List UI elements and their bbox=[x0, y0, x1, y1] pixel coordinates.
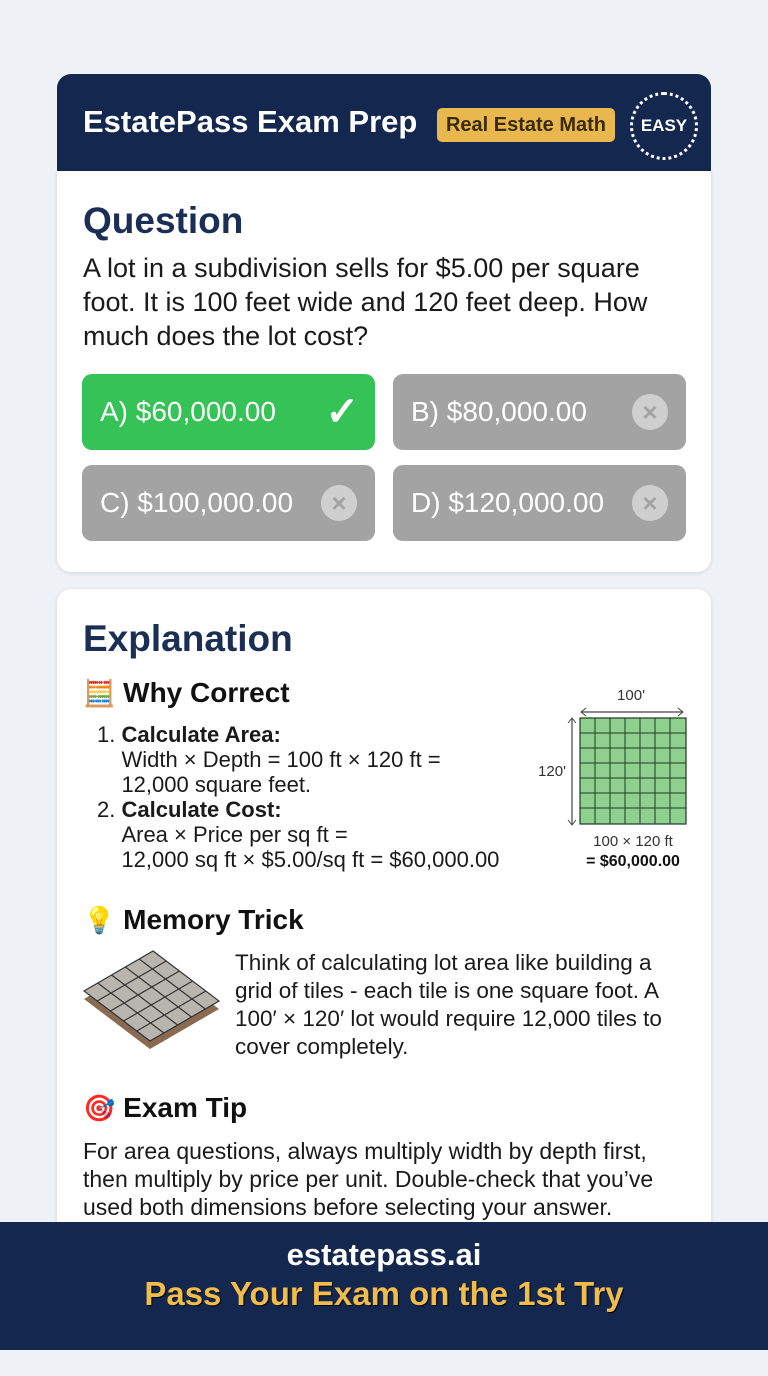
steps: Width × Depth = 100 ft × 120 ft = bbox=[121, 747, 441, 772]
option A correct: A) $60,000.00 bbox=[100, 396, 276, 427]
option C: C) $100,000.00 bbox=[100, 487, 293, 518]
steps: 2. Calculate Cost: bbox=[97, 797, 282, 822]
question text: A lot in a subdivision sells for $5.00 per square foot. It is 100 feet wide and 120 feet deep. How much does the lot cost? bbox=[83, 253, 647, 351]
heading: Why Correct: 🧮 Why Correct bbox=[83, 677, 290, 708]
footer tagline: Pass Your Exam on the 1st Try bbox=[144, 1275, 624, 1312]
footer bbox=[0, 1222, 768, 1350]
option C bbox=[82, 465, 375, 541]
memory text: Think of calculating lot area like building a grid of tiles - each tile is one square foot. A 100′ × 120′ lot would require 12,000 tiles to cover completely. bbox=[235, 950, 662, 1059]
exam tip text: For area questions, always multiply width by depth first, then multiply by price per unit. Double-check that you’ve used both dimensions before selecting your answer. bbox=[83, 1138, 653, 1220]
option B bbox=[393, 374, 686, 450]
icon: tile grid bbox=[83, 950, 220, 1049]
title: EstatePass Exam Prep bbox=[83, 104, 417, 139]
option D bbox=[393, 465, 686, 541]
option D: D) $120,000.00 bbox=[411, 487, 604, 518]
badge: EASY bbox=[630, 92, 698, 160]
heading: Memory Trick: 💡 Memory Trick bbox=[83, 904, 304, 935]
option B: × bbox=[642, 397, 658, 427]
steps: Area × Price per sq ft = bbox=[121, 822, 348, 847]
diagram: lot grid: = $60,000.00 bbox=[586, 853, 680, 870]
option A correct bbox=[82, 374, 375, 450]
steps: 12,000 square feet. bbox=[121, 772, 311, 797]
steps bbox=[97, 722, 499, 872]
heading: Explanation: Explanation bbox=[83, 618, 293, 659]
badge: Real Estate Math: Real Estate Math bbox=[446, 114, 606, 136]
option A correct: ✓ bbox=[325, 390, 359, 434]
option B: B) $80,000.00 bbox=[411, 396, 587, 427]
heading: Question: Question bbox=[83, 200, 243, 241]
badge: EASY: EASY bbox=[641, 116, 687, 135]
header bar bbox=[57, 74, 711, 171]
option D: × bbox=[642, 488, 658, 518]
badge: Real Estate Math bbox=[437, 108, 615, 142]
panel: question bbox=[57, 171, 711, 572]
steps: 1. Calculate Area: bbox=[97, 722, 281, 747]
panel: explanation bbox=[57, 589, 711, 1289]
diagram: lot grid bbox=[538, 687, 687, 870]
diagram: lot grid: 120' bbox=[538, 763, 566, 780]
diagram: lot grid: 100 × 120 ft bbox=[593, 833, 674, 850]
heading: Exam Tip: 🎯 Exam Tip bbox=[83, 1092, 247, 1123]
option C: × bbox=[331, 488, 347, 518]
diagram: lot grid: 100' bbox=[617, 687, 645, 704]
footer url: estatepass.ai bbox=[287, 1237, 481, 1272]
steps: 12,000 sq ft × $5.00/sq ft = $60,000.00 bbox=[121, 847, 499, 872]
